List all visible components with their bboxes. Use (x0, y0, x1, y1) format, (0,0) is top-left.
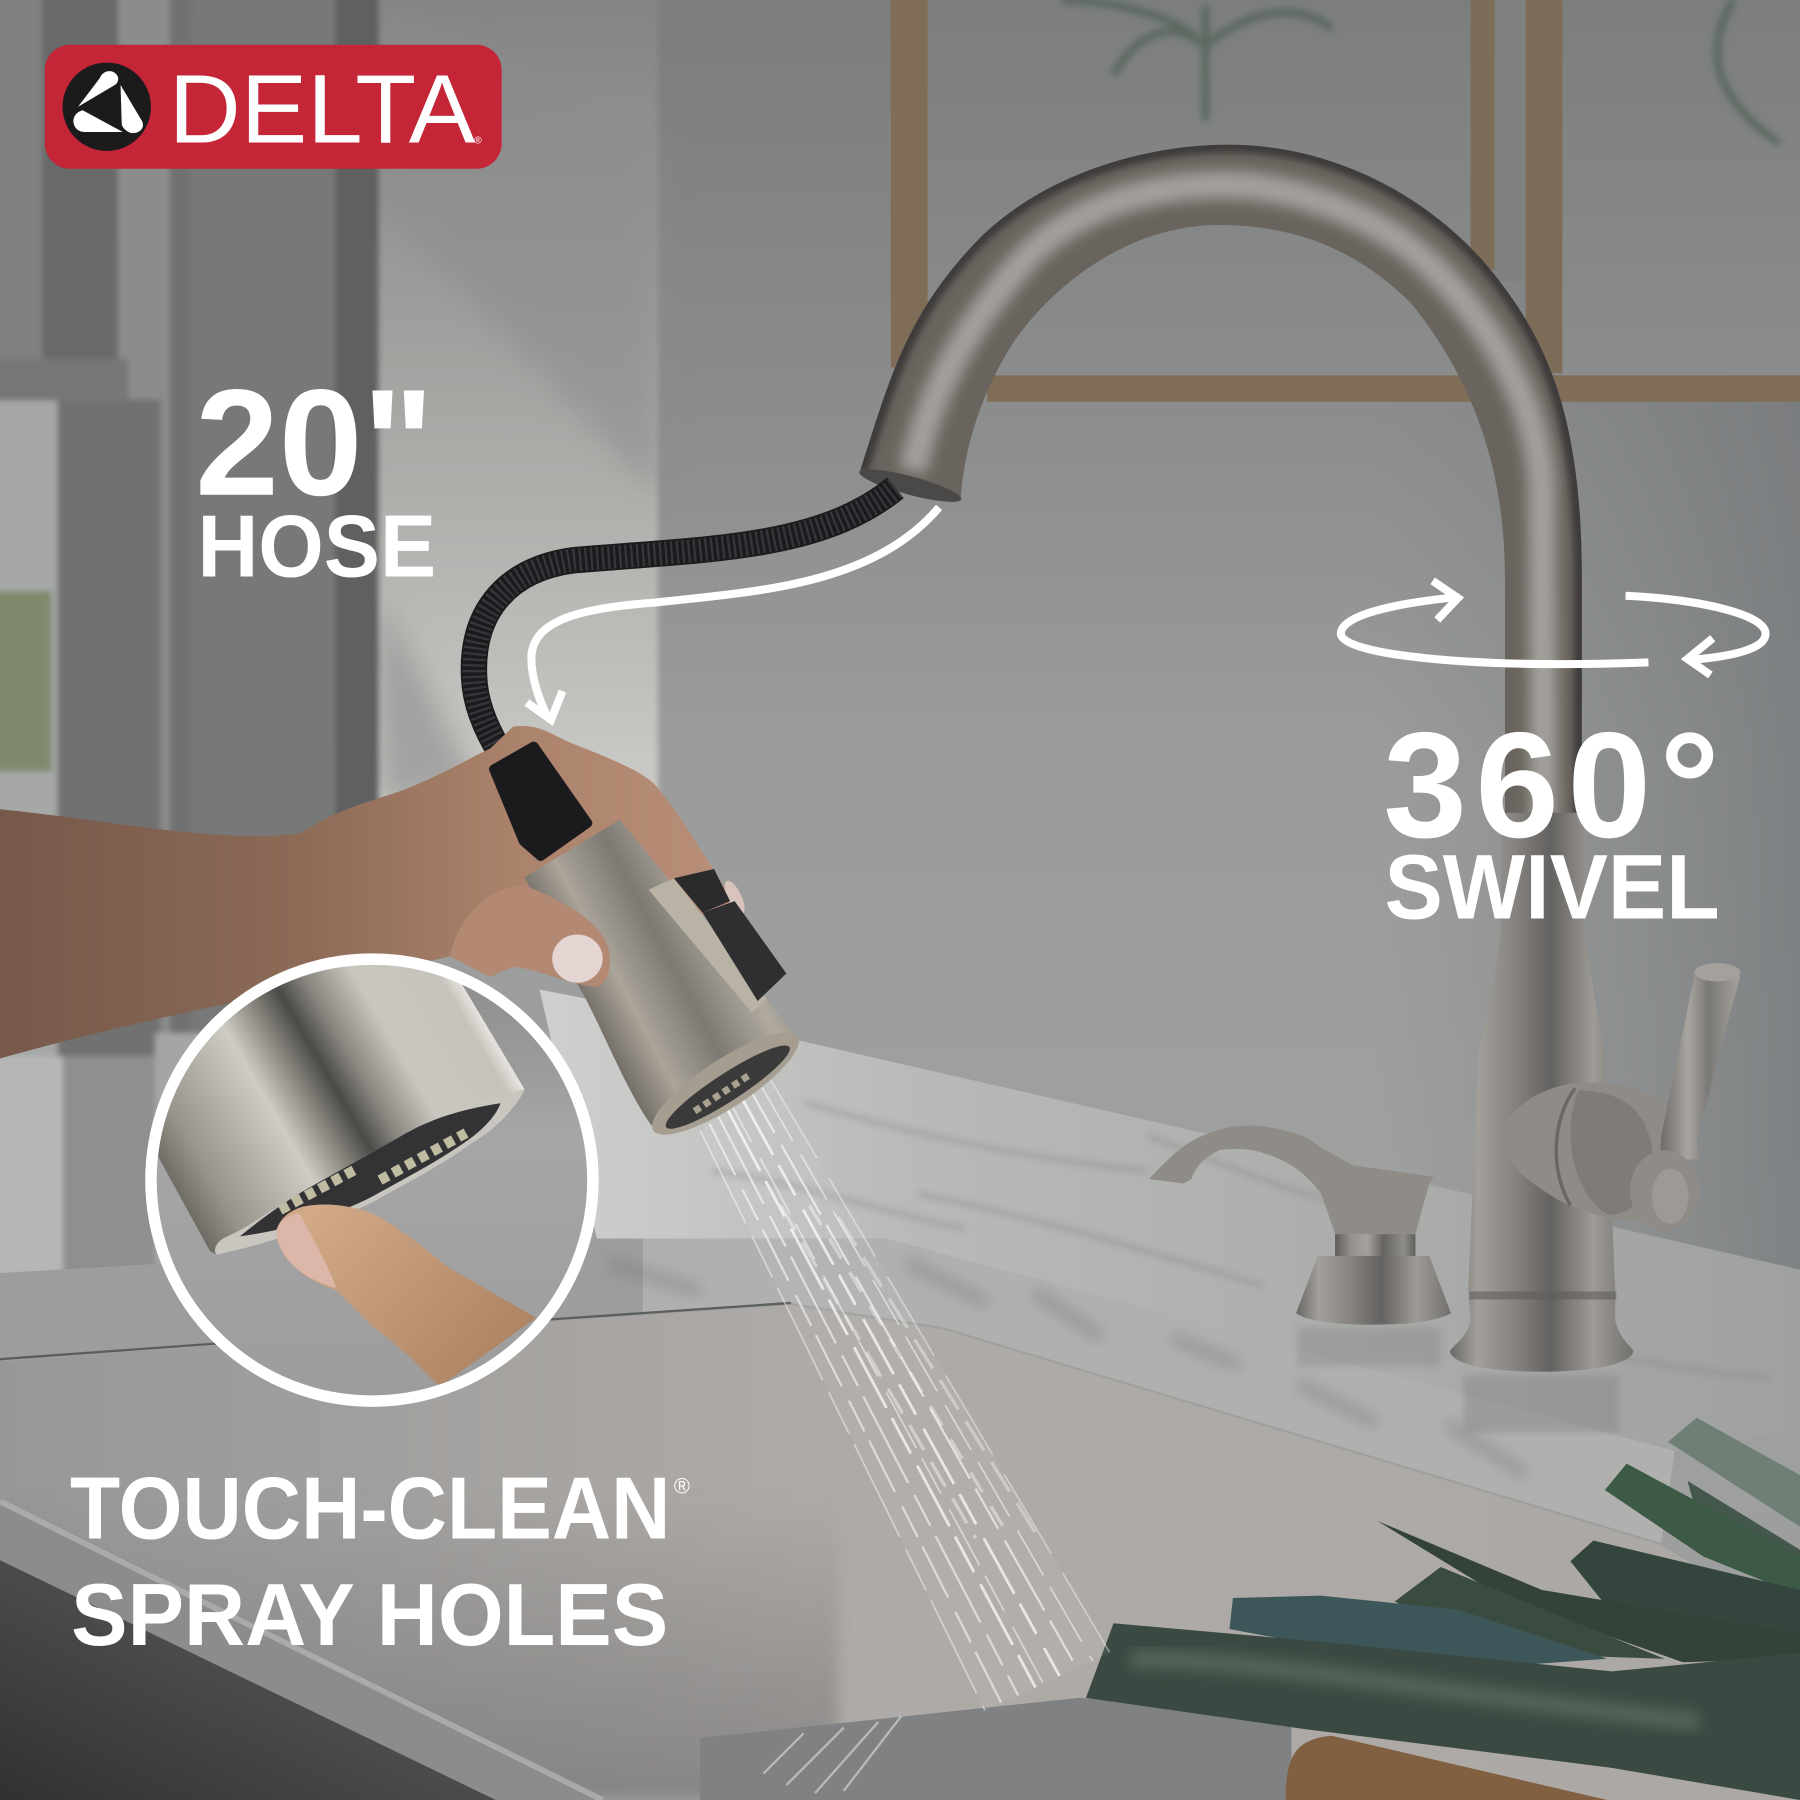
callout: touch-clean spray holes: TOUCH-CLEAN (70, 1458, 670, 1557)
braided hose (474, 488, 895, 763)
callout: 20 inch hose: HOSE (197, 496, 436, 595)
inset: spray face with nubs (215, 1089, 525, 1255)
wooden picture frames on wall (891, 0, 1800, 402)
callout: touch-clean spray holes (70, 1458, 690, 1664)
callout: touch-clean spray holes: SPRAY HOLES (71, 1565, 668, 1664)
faucet with gooseneck spout (849, 138, 1740, 1433)
pull-down sprayer head (494, 746, 811, 1151)
Delta logo badge: DELTA (169, 54, 475, 163)
inset circle: touch-clean spray holes (138, 941, 608, 1412)
leafy greens and cutting board (1086, 1418, 1800, 1800)
arrow: hose pull-down direction (527, 507, 939, 720)
handle hub (1500, 1082, 1668, 1223)
lever (1660, 970, 1740, 1159)
inset: fingertip (277, 1204, 536, 1387)
soap dispenser (1149, 1125, 1451, 1366)
Delta logo badge (45, 45, 502, 169)
arrow: 360 swivel rotation (1341, 581, 1766, 675)
Delta logo badge: ® (474, 135, 482, 146)
callout: 20 inch hose: 20" (195, 359, 434, 528)
thumb with painted nail (450, 886, 610, 987)
arm and hand holding sprayer (0, 726, 749, 1058)
sink basin (0, 1305, 1800, 1800)
callout: 360 degree swivel: SWIVEL (1384, 836, 1720, 938)
faucet lower body (1450, 813, 1634, 1372)
callout: touch-clean spray holes: ® (674, 1473, 690, 1498)
inset: sprayer cylinder (158, 964, 524, 1255)
water spray (700, 1079, 1110, 1793)
callout: 360 degree swivel: 360° (1383, 701, 1720, 869)
marble countertop (0, 990, 1800, 1543)
gooseneck tube (860, 144, 1582, 813)
